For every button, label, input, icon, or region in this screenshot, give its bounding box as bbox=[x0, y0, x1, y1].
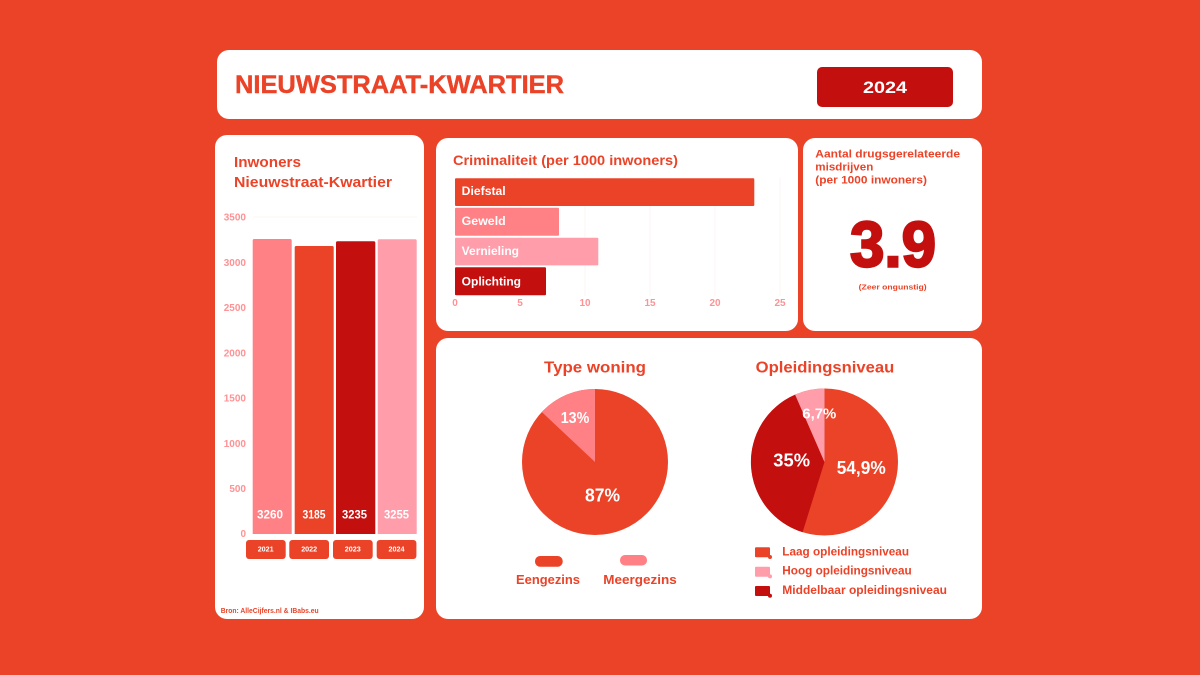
x axis labels bbox=[452, 298, 786, 309]
x axis labels: 5 bbox=[517, 298, 523, 309]
panel: crime bbox=[436, 138, 798, 331]
bar: Geweld bbox=[455, 208, 559, 236]
y axis labels: 3000 bbox=[224, 258, 246, 269]
year badge: 2024 bbox=[863, 78, 908, 97]
heading: drug offences: (per 1000 inwoners) bbox=[815, 174, 927, 186]
x axis labels: 15 bbox=[644, 298, 656, 309]
panel: header bbox=[217, 50, 982, 119]
heading: crime: Criminaliteit (per 1000 inwoners) bbox=[453, 152, 678, 168]
panel: housing and education bbox=[436, 338, 982, 619]
legend: high education: Hoog opleidingsniveau bbox=[782, 566, 912, 578]
y axis labels bbox=[224, 212, 246, 540]
bar: Geweld: Geweld bbox=[462, 216, 506, 228]
housing type section bbox=[516, 360, 677, 587]
heading: inhabitants: Nieuwstraat-Kwartier bbox=[234, 174, 392, 191]
bar chart: inhabitants per year bbox=[224, 212, 417, 559]
year labels: 2022 bbox=[301, 544, 317, 554]
y axis labels: 1500 bbox=[224, 394, 246, 404]
bar: Diefstal: Diefstal bbox=[462, 186, 506, 198]
y axis labels: 500 bbox=[229, 484, 246, 495]
pie chart: education: 35% bbox=[773, 451, 810, 471]
year labels: 2024 bbox=[388, 544, 405, 554]
bar: Oplichting: Oplichting bbox=[462, 276, 521, 288]
heading: housing type: Type woning bbox=[544, 360, 646, 376]
heading: inhabitants bbox=[234, 154, 392, 191]
heading: drug offences bbox=[815, 148, 960, 186]
heading: drug offences: Aantal drugsgerelateerde bbox=[815, 148, 960, 160]
bar values: 3185 bbox=[302, 510, 326, 522]
panel: inhabitants bbox=[215, 135, 424, 619]
legend: Meergezins: Meergezins bbox=[603, 572, 677, 587]
bar: Oplichting bbox=[455, 267, 546, 295]
rating note: (Zeer ongunstig) bbox=[859, 282, 927, 292]
bar: Vernieling bbox=[455, 238, 598, 265]
heading: drug offences: misdrijven bbox=[815, 161, 874, 173]
education section bbox=[751, 360, 947, 598]
pie chart: housing type: 13% bbox=[561, 410, 589, 427]
legend: Eengezins bbox=[516, 556, 580, 587]
legend: middle education: Middelbaar opleidingsniveau bbox=[782, 585, 947, 597]
y axis labels: 2000 bbox=[224, 348, 246, 360]
x axis labels: 0 bbox=[452, 298, 458, 309]
panel: drug offences bbox=[803, 138, 982, 331]
y axis labels: 0 bbox=[240, 529, 246, 540]
bar values bbox=[257, 510, 410, 522]
bar values: 3260 bbox=[257, 510, 283, 522]
bar: Vernieling: Vernieling bbox=[462, 246, 519, 258]
pie chart: education bbox=[751, 388, 898, 536]
heading: education: Opleidingsniveau bbox=[756, 360, 894, 377]
year labels bbox=[246, 540, 416, 559]
heading: inhabitants: Inwoners bbox=[234, 154, 301, 171]
pie chart: housing type: 87% bbox=[585, 486, 620, 506]
x axis labels: 25 bbox=[774, 298, 786, 309]
bar: Diefstal bbox=[455, 178, 754, 206]
bar values: 3235 bbox=[342, 510, 368, 522]
legend: Eengezins: Eengezins bbox=[516, 572, 580, 587]
legend: Meergezins bbox=[603, 555, 677, 587]
pie chart: education: 6,7% bbox=[802, 405, 836, 422]
legend: low education: Laag opleidingsniveau bbox=[782, 546, 909, 558]
x axis labels: 10 bbox=[579, 298, 591, 309]
x axis labels: 20 bbox=[709, 298, 721, 309]
bar chart: crime bbox=[452, 178, 786, 309]
year badge bbox=[817, 67, 953, 107]
y axis labels: 3500 bbox=[224, 212, 246, 224]
bar values: 3255 bbox=[384, 510, 410, 522]
big number: 3.9 bbox=[850, 208, 936, 280]
source note: Bron: AlleCijfers.nl & IBabs.eu bbox=[221, 608, 319, 615]
pie chart: housing type bbox=[522, 389, 668, 535]
bars bbox=[253, 239, 417, 534]
title: NIEUWSTRAAT-KWARTIER bbox=[235, 71, 564, 99]
year labels: 2021 bbox=[258, 544, 274, 554]
pie chart: education: 54,9% bbox=[837, 458, 886, 478]
year labels: 2023 bbox=[345, 544, 361, 554]
y axis labels: 1000 bbox=[224, 439, 246, 450]
y axis labels: 2500 bbox=[224, 303, 246, 314]
